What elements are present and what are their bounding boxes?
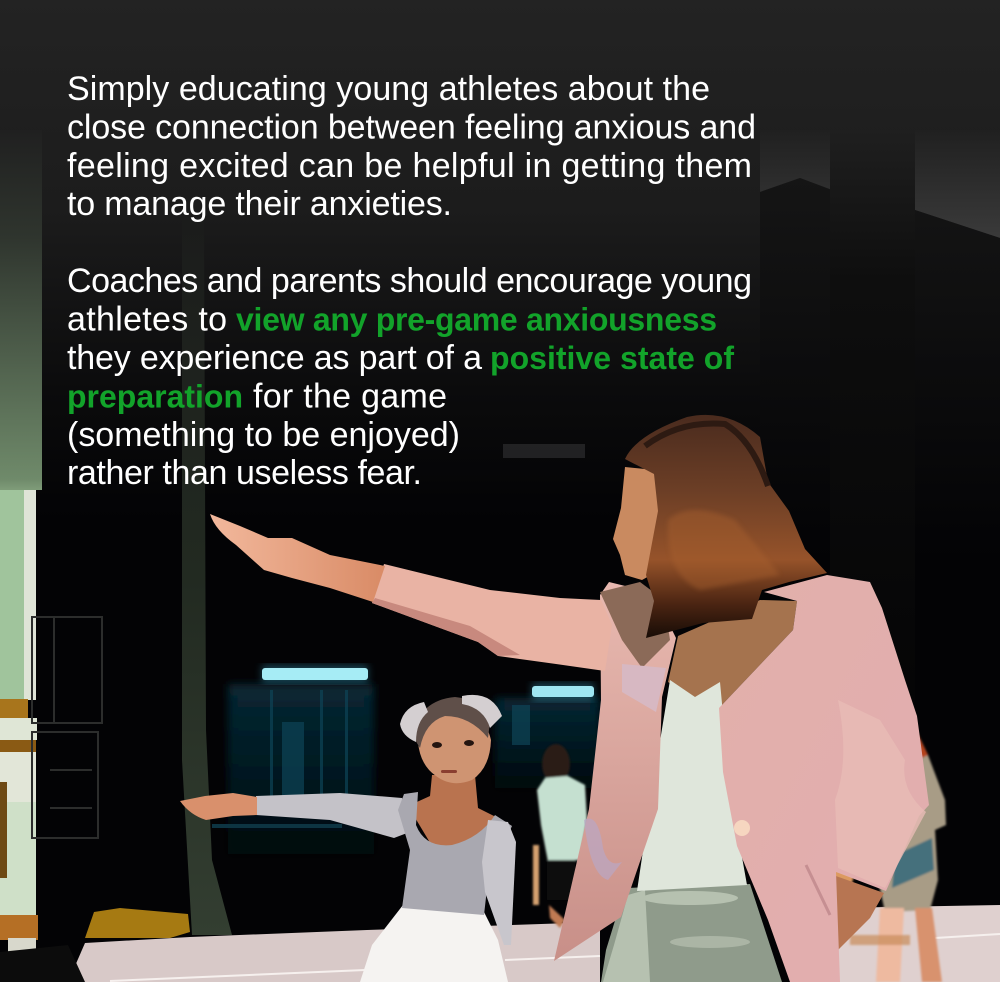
text block: coaches and parents: [67, 262, 752, 492]
woman: white camisole: [637, 680, 747, 891]
woman: forearm and hand: [210, 514, 385, 602]
text block: coaches and parents: they experience as part of a: [67, 339, 482, 377]
dark fade at top of the photo: [0, 0, 1000, 520]
girl: lace hair buns: [400, 695, 502, 742]
text block: coaches and parents: rather than useless fear.: [67, 454, 422, 492]
text block: coaches and parents: for the game: [253, 378, 447, 416]
stage floor: [0, 905, 1000, 982]
woman: right sleeve fold: [835, 700, 926, 888]
girl: head: [418, 706, 491, 783]
text block: coaches and parents: athletes to: [67, 300, 227, 338]
woman: blazer right panel and sleeve: [719, 575, 929, 982]
woman: light trouser folds: [603, 890, 750, 982]
girl in grey leotard and tutu: [180, 695, 516, 982]
woman: pale highlight on lapel: [622, 664, 666, 712]
girl: neck and chest: [408, 775, 498, 848]
girl: raised arm sleeve: [256, 793, 415, 838]
girl: hand: [180, 793, 257, 820]
text block: coaches and parents: (something to be enjoyed): [67, 416, 460, 454]
woman: collar in shadow: [600, 582, 670, 668]
text block: coaches and parents: preparation: [67, 378, 243, 414]
background people at right: [826, 728, 946, 982]
hanging green curtain: [182, 220, 232, 935]
gold fabric pile: [85, 908, 190, 938]
girl: eyes and mouth: [432, 740, 474, 773]
girl: tutu: [360, 905, 508, 982]
faint fixture behind the woman: [503, 444, 585, 458]
woman: sleeve shadow fold: [372, 598, 520, 656]
woman: hair shine: [668, 510, 780, 590]
background person in mint dress: [533, 744, 587, 928]
text block: educating young athletes: Simply educating young athletes about the: [67, 70, 710, 108]
text block: coaches and parents: view any pre-game anxiousness: [236, 302, 717, 338]
woman in pink blazer: [210, 415, 929, 982]
woman: trousers: [601, 884, 782, 982]
left column: [0, 130, 42, 952]
woman: skin at neck and chest: [668, 600, 797, 708]
ceiling highlights at upper right: [760, 130, 1000, 730]
text block: coaches and parents: positive state of: [490, 340, 734, 376]
text block: educating young athletes: close connection between feeling anxious and: [67, 108, 756, 146]
woman: outstretched sleeve: [372, 564, 612, 671]
woman: lavender fold near hem: [584, 819, 622, 880]
backstage blue lit area: [212, 665, 600, 854]
woman: braid: [645, 423, 768, 486]
text block: educating young athletes: to manage their anxieties.: [67, 185, 452, 223]
backstage frames at left: [32, 617, 102, 838]
woman: button: [734, 820, 750, 836]
girl: far arm: [482, 820, 516, 945]
woman: face: [613, 467, 666, 580]
text block: educating young athletes: [67, 70, 756, 223]
woman: hair: [625, 415, 827, 638]
woman: blazer left panel: [554, 582, 676, 961]
girl: leotard torso: [398, 792, 512, 915]
girl: hair: [412, 697, 490, 748]
woman: pocket flap: [806, 865, 830, 915]
text block: educating young athletes: feeling excited can be helpful in getting them: [67, 147, 752, 185]
woman: far arm at hip: [828, 875, 884, 950]
text block: coaches and parents: Coaches and parents should encourage young: [67, 262, 752, 300]
